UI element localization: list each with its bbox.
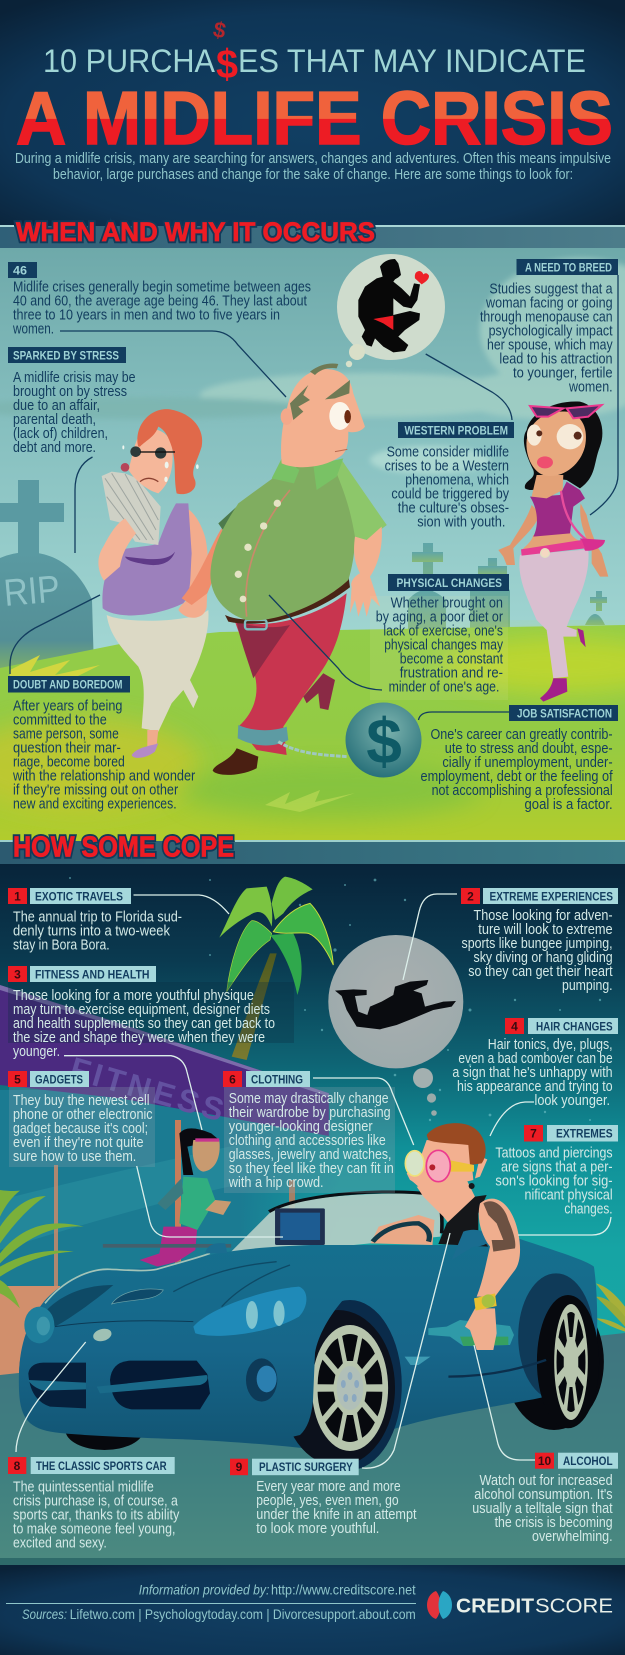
item 6: clothing: their wardrobe by purchasing	[229, 1105, 391, 1121]
item 7: extremes: 7	[530, 1126, 537, 1140]
section heading: when and why it occurs: WHEN AND WHY IT OCCURS	[16, 217, 375, 247]
block: western problem: phenomena, which	[405, 473, 509, 489]
item 3: fitness and health: the size and shape they were when they were	[13, 1030, 265, 1046]
connector lines	[16, 894, 611, 1468]
side mirror	[452, 1230, 492, 1260]
item 5: gadgets: They buy the newest cell	[13, 1093, 150, 1109]
intro text	[15, 150, 611, 183]
block: 46: Midlife crises generally begin sometime between ages	[13, 280, 311, 296]
item 9: plastic surgery: PLASTIC SURGERY	[259, 1460, 353, 1474]
arms	[498, 505, 540, 565]
block: doubt and boredom: After years of being	[13, 699, 122, 715]
item 6: clothing	[223, 1071, 394, 1191]
block: doubt and boredom: committed to the	[13, 713, 107, 729]
item 9: plastic surgery: Every year more and more	[256, 1479, 401, 1495]
cross and tombstone with RIP	[0, 480, 94, 670]
item 9: plastic surgery: 9	[236, 1460, 243, 1474]
bag and belt	[580, 538, 605, 551]
car rear, windshield and side	[19, 1192, 604, 1470]
car body	[19, 1238, 597, 1450]
title: line one: ES THAT MAY INDICATE	[238, 43, 586, 79]
ball with dollar sign	[346, 702, 422, 778]
front wheel rim	[312, 1325, 388, 1451]
red hair	[137, 409, 202, 494]
section heading: how some cope: HOW SOME COPE	[13, 832, 234, 864]
block: western problem	[385, 422, 514, 531]
block: doubt and boredom	[8, 676, 195, 813]
block: physical changes: physical changes may	[384, 638, 504, 654]
door crease	[448, 1360, 546, 1377]
item 9: plastic surgery	[230, 1459, 416, 1537]
item 5: gadgets: 5	[14, 1072, 21, 1086]
block: western problem: WESTERN PROBLEM	[404, 424, 508, 438]
block: sparked by stress: brought on by stress	[13, 384, 127, 400]
fog light	[246, 1358, 277, 1402]
section heading: when and why it occurs: WHEN AND WHY IT OCCURS	[16, 217, 375, 247]
block: doubt and boredom: DOUBT AND BOREDOM	[13, 678, 122, 692]
green shirt	[210, 460, 387, 620]
block: western problem: could be triggered by	[391, 487, 510, 503]
purple top	[530, 482, 585, 537]
trailing leg and shoe	[303, 673, 335, 710]
item 3: fitness and health: FITNESS AND HEALTH	[35, 968, 150, 982]
icon: heart	[415, 271, 429, 284]
front details	[24, 1253, 290, 1409]
steering wheel	[373, 1223, 429, 1242]
panel: how some cope	[0, 864, 625, 1565]
block: doubt and boredom: riage, become bored	[13, 755, 125, 771]
item 7: extremes: nificant physical	[524, 1187, 613, 1203]
runner on treadmill	[103, 1128, 231, 1267]
item 6: clothing: CLOTHING	[251, 1072, 303, 1086]
hood shading	[47, 1285, 113, 1327]
block: 46: 46	[13, 264, 27, 278]
item 8: the classic sports car: sports car, thanks to its ability	[13, 1507, 180, 1523]
title: line one: $	[216, 41, 238, 87]
cross and tombstone with RIP: RIP	[2, 568, 62, 615]
item 8: the classic sports car: 8	[14, 1459, 21, 1473]
header background	[0, 0, 625, 228]
block: physical changes: PHYSICAL CHANGES	[396, 576, 502, 590]
neck and face	[532, 475, 563, 498]
tattooed arm	[477, 1199, 520, 1297]
source credits: Information provided by:	[139, 1581, 269, 1597]
block: physical changes	[376, 574, 509, 696]
section heading: when and why it occurs	[0, 217, 625, 248]
watch	[474, 1293, 497, 1311]
item 3: fitness and health: and health supplements so they can get back to	[13, 1016, 275, 1032]
trousers	[107, 610, 209, 732]
item 1: exotic travels	[8, 888, 182, 954]
block: physical changes: by aging, a poor diet or	[376, 610, 503, 626]
front wheel arch and tyre	[298, 1300, 402, 1470]
title: line one	[43, 16, 586, 87]
block: physical changes: become a constant	[400, 652, 503, 668]
block: sparked by stress: debt and more.	[13, 440, 96, 456]
block: sparked by stress	[8, 347, 136, 456]
fitness awning	[0, 985, 329, 1136]
block: doubt and boredom: question their mar-	[13, 741, 121, 757]
item 8: the classic sports car: crisis purchase is, of course, a	[13, 1493, 179, 1509]
hair	[427, 1123, 486, 1165]
belt	[225, 575, 350, 624]
section heading: how some cope: HOW SOME COPE	[13, 832, 234, 864]
section heading: how some cope	[0, 832, 625, 864]
sports car	[19, 1192, 604, 1470]
item 8: the classic sports car	[8, 1457, 180, 1551]
item 3: fitness and health: younger.	[13, 1044, 60, 1060]
hood vent	[112, 1289, 163, 1304]
left arm at wheel	[371, 1215, 434, 1245]
purple top	[102, 503, 192, 615]
block: doubt and boredom: same person, some	[13, 727, 119, 743]
ear and plug	[475, 1157, 487, 1178]
item 4: hair changes	[452, 1018, 618, 1109]
ball with dollar sign: $	[366, 705, 402, 777]
hand	[465, 1308, 497, 1350]
item 9: plastic surgery: under the knife in an attempt	[256, 1507, 416, 1523]
face	[407, 1140, 473, 1190]
item 8: the classic sports car: excited and sexy.	[13, 1535, 107, 1551]
block: physical changes: Whether brought on	[391, 596, 503, 612]
item 6: clothing: glasses, jewelry and watches,	[229, 1147, 391, 1163]
item 1: exotic travels: 1	[14, 890, 21, 904]
lower left building background	[0, 1090, 340, 1376]
panel: when and why it occurs	[0, 248, 625, 841]
grille	[28, 1363, 86, 1408]
source credits: Lifetwo.com | Psychologytoday.com | Divorcesupport.about.com	[70, 1606, 416, 1622]
block: sparked by stress: (lack of) children,	[13, 426, 108, 442]
block: doubt and boredom: if they're missing out on other	[13, 783, 178, 799]
item 10: alcohol	[472, 1453, 618, 1545]
item 1: exotic travels: EXOTIC TRAVELS	[35, 890, 123, 904]
item 5: gadgets	[8, 1071, 153, 1165]
rear wheel rim	[554, 1304, 588, 1420]
item 7: extremes: EXTREMES	[556, 1126, 613, 1140]
near arm and hand	[98, 518, 136, 581]
item 8: the classic sports car: to make someone feel young,	[13, 1521, 175, 1537]
fan	[102, 472, 161, 545]
item 3: fitness and health: may turn to exercise equipment, designer diets	[13, 1002, 270, 1018]
title: line one: 10 PURCHA	[43, 43, 216, 79]
item 3: fitness and health: 3	[14, 968, 21, 982]
creditscore logo: CREDIT	[456, 1596, 534, 1618]
item 1: exotic travels: denly turns into a two-week	[13, 924, 171, 940]
road	[0, 1333, 625, 1565]
block: physical changes: lack of exercise, one's	[383, 624, 503, 640]
grey hair	[290, 364, 350, 420]
main headlight and mirror	[193, 1243, 306, 1336]
shirt buttons	[235, 500, 281, 602]
item 5: gadgets: phone or other electronic	[13, 1107, 153, 1123]
title: line one: $	[211, 16, 228, 43]
item 8: the classic sports car: The quintessential midlife	[13, 1479, 154, 1495]
left headlight	[24, 1307, 54, 1343]
block: job satisfaction	[420, 705, 618, 813]
palm tree	[219, 877, 333, 1060]
block: 46: three to 10 years in men and two to five years in	[13, 308, 280, 324]
car front body	[19, 1245, 343, 1442]
eye	[329, 402, 351, 430]
source credits: http://www.creditscore.net	[271, 1581, 416, 1597]
hood edge highlight	[45, 1253, 210, 1303]
goggles	[405, 1151, 424, 1176]
text overlays	[370, 596, 508, 700]
block: a need to breed	[480, 259, 618, 396]
sky background	[0, 248, 625, 688]
item 6: clothing: Some may drastically change	[229, 1091, 389, 1107]
source credits	[6, 1581, 416, 1622]
driver	[405, 1123, 520, 1350]
sunglasses on head	[530, 405, 602, 418]
item 7: extremes	[495, 1125, 618, 1217]
block: sparked by stress: due to an affair,	[13, 398, 100, 414]
item 5: gadgets: gadget because it's cool;	[13, 1121, 148, 1137]
item 1: exotic travels: stay in Bora Bora.	[13, 938, 110, 954]
neck	[417, 1180, 475, 1225]
young woman	[498, 402, 608, 702]
clouds	[0, 258, 625, 474]
stars	[69, 877, 601, 1151]
item 5: gadgets: GADGETS	[35, 1072, 83, 1086]
item 6: clothing: younger-looking designer	[229, 1119, 373, 1135]
block: physical changes: frustration and re-	[400, 666, 503, 682]
block: western problem: sion with youth.	[417, 515, 505, 531]
trousers	[519, 549, 589, 678]
block: doubt and boredom: with the relationship and wonder	[12, 769, 195, 785]
block: sparked by stress: parental death,	[13, 412, 96, 428]
shoes	[540, 678, 567, 702]
block: a need to breed: to younger, fertile	[513, 366, 613, 382]
item 7: extremes: changes.	[564, 1201, 613, 1217]
logo badge	[92, 1327, 113, 1343]
item 6: clothing: so they feel like they can fit in	[229, 1161, 394, 1177]
item 3: fitness and health	[8, 966, 275, 1060]
source credits: Sources:	[22, 1606, 67, 1622]
block: 46: 40 and 60, the average age being 46. They last about	[13, 294, 307, 310]
item 9: plastic surgery: to look more youthful.	[256, 1521, 379, 1537]
windshield	[231, 1194, 442, 1252]
ankle cuff	[238, 725, 288, 745]
footer	[0, 1565, 625, 1655]
item 4: hair changes: 4	[511, 1020, 518, 1034]
icon: red thong	[373, 316, 393, 330]
block: sparked by stress: A midlife crisis may be	[13, 370, 136, 386]
far arm	[178, 507, 208, 618]
laptop	[275, 1208, 325, 1245]
item 6: clothing: clothing and accessories like	[229, 1133, 386, 1149]
item 2: extreme experiences: 2	[467, 890, 474, 904]
item 10: alcohol: overwhelming.	[532, 1529, 613, 1545]
item 5: gadgets: sure how to use them.	[13, 1149, 136, 1165]
front arm and hand	[350, 527, 382, 617]
item 4: hair changes: look younger.	[534, 1093, 610, 1109]
midriff	[522, 532, 583, 550]
block: job satisfaction: goal is a factor.	[524, 797, 613, 813]
grass	[0, 625, 625, 841]
black hair	[524, 402, 602, 490]
item 9: plastic surgery: people, yes, even men, go	[256, 1493, 399, 1509]
back arm	[182, 528, 227, 605]
block: physical changes: minder of one's age.	[389, 680, 499, 696]
block: 46: women.	[12, 322, 54, 338]
creditscore logo: SCORE	[535, 1596, 613, 1618]
head	[281, 369, 365, 467]
item 5: gadgets: even if they're not quite	[13, 1135, 144, 1151]
block: a need to breed: women.	[568, 380, 613, 396]
item 10: alcohol: ALCOHOL	[563, 1454, 613, 1468]
item 10: alcohol: 10	[538, 1454, 551, 1468]
thought bubble	[337, 254, 445, 367]
item 3: fitness and health: Those looking for a more youthful physique	[13, 988, 254, 1004]
red trousers	[235, 593, 347, 755]
block: western problem: the culture's obses-	[398, 501, 509, 517]
woman with fan	[98, 409, 209, 758]
chain	[278, 742, 347, 757]
creditscore logo	[427, 1591, 613, 1619]
sunglasses	[130, 446, 175, 459]
distant crosses	[408, 543, 607, 640]
item 1: exotic travels: The annual trip to Florida sud-	[13, 910, 182, 926]
item 7: extremes: son's looking for sig-	[495, 1173, 613, 1189]
thought bubble with skydiver	[328, 935, 463, 1116]
rear wheel arch and tyre	[518, 1273, 594, 1400]
block: doubt and boredom: new and exciting experiences.	[13, 797, 177, 813]
icon: man silhouette	[358, 259, 420, 352]
night sky	[0, 864, 625, 1400]
bottle	[428, 1320, 514, 1346]
shoe	[213, 748, 258, 775]
front low tyre	[65, 1410, 143, 1450]
face	[128, 429, 173, 493]
item 2: extreme experiences	[461, 888, 618, 994]
block: sparked by stress: SPARKED BY STRESS	[13, 348, 119, 362]
text overlays	[8, 982, 395, 1193]
icon: skydiver silhouette	[335, 980, 456, 1029]
item 6: clothing: 6	[229, 1072, 236, 1086]
connector lines	[10, 275, 618, 720]
block: western problem: crises to be a Western	[385, 459, 509, 475]
block: western problem: Some consider midlife	[387, 445, 509, 461]
fitness awning: FITNESS	[66, 1050, 228, 1128]
item 8: the classic sports car: THE CLASSIC SPORTS CAR	[36, 1459, 167, 1473]
man with big belly	[182, 364, 387, 775]
block: 46	[8, 262, 311, 338]
item 6: clothing: with a hip crowd.	[228, 1175, 324, 1191]
black tank top	[438, 1195, 488, 1247]
rear tyre	[504, 1293, 604, 1430]
item 2: extreme experiences: pumping.	[562, 978, 613, 994]
palm plants	[0, 1190, 625, 1332]
